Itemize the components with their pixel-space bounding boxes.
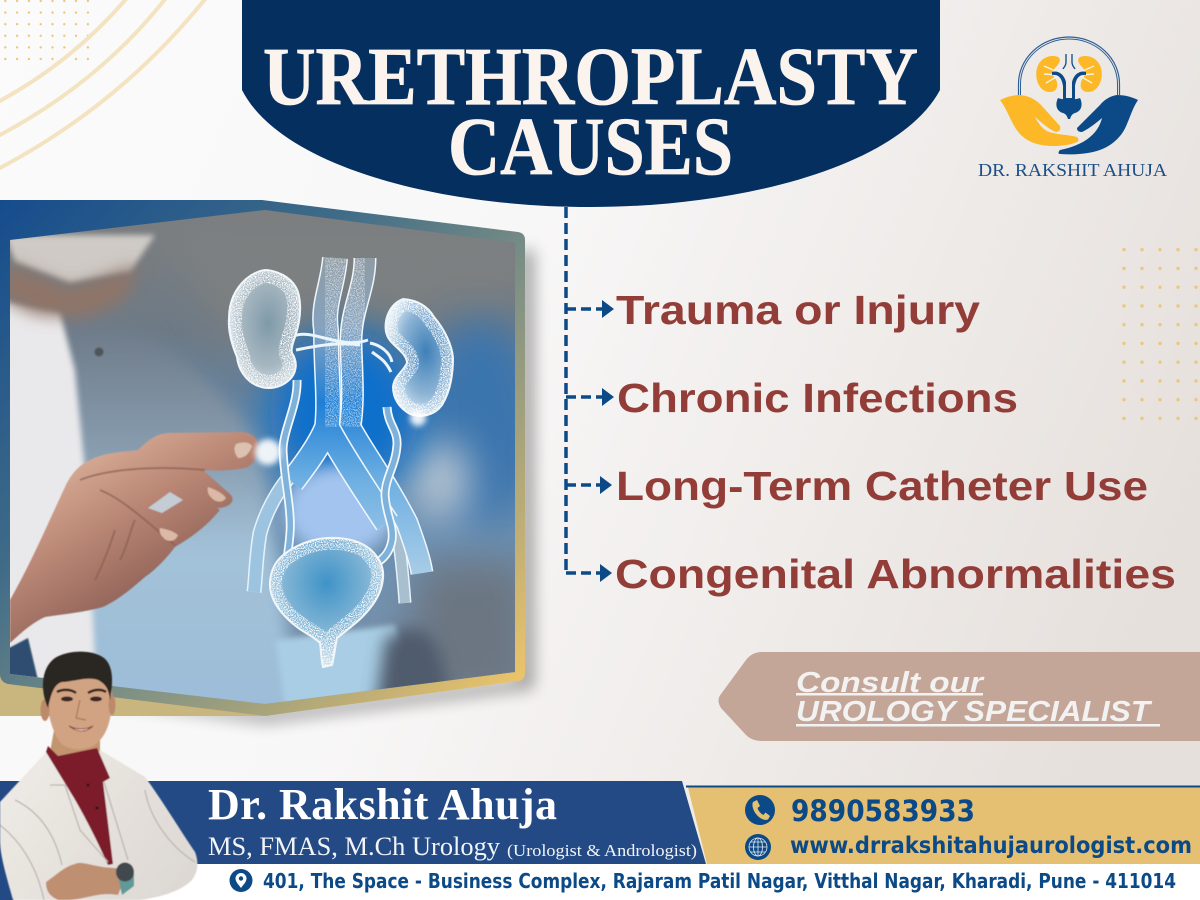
- footer: address strip: [0, 864, 1200, 900]
- tube texture: [325, 258, 365, 427]
- organ: bladder: [270, 538, 383, 667]
- frame back fold: [0, 200, 262, 260]
- arrow 2: [566, 388, 614, 406]
- head: [40, 652, 116, 749]
- footer: contact band: [686, 786, 1200, 864]
- photo blue glow: [270, 330, 420, 555]
- title text: CAUSES: [448, 100, 733, 192]
- renal vessels: [294, 334, 392, 372]
- arrow 3: [566, 476, 612, 494]
- title banner: [242, 0, 940, 207]
- photo panel: frame and image: [0, 200, 540, 722]
- title text: [263, 30, 918, 192]
- organ: left kidney: [229, 270, 300, 388]
- shirt: [46, 746, 113, 865]
- decoration: right dot grid: [1115, 240, 1200, 428]
- nose and smile: [76, 700, 86, 720]
- doctor name: Dr. Rakshit Ahuja: [208, 780, 557, 829]
- logo hand: blue: [1058, 95, 1138, 154]
- light flares: [255, 410, 426, 465]
- cause 2: Chronic Infections: [617, 375, 1018, 421]
- photo blurred backdrop: [70, 220, 540, 720]
- logo kidneys: [1036, 56, 1102, 92]
- hair: [43, 652, 112, 708]
- brows and eyes: [57, 690, 106, 693]
- coat folds: [0, 782, 195, 900]
- globe icon: [745, 834, 771, 860]
- footer: doctor name band: [0, 780, 706, 900]
- cause connector: dashed tree with arrows: [566, 207, 614, 582]
- callout: consult specialist: UROLOGY SPECIALIST: [796, 696, 1152, 728]
- photo coat and mask: [0, 235, 155, 700]
- phone number: 9890583933: [791, 794, 975, 828]
- coat: [0, 748, 197, 900]
- logo wordmark: DR. RAKSHIT AHUJA: [978, 160, 1167, 180]
- outer iliac branches: [254, 467, 300, 592]
- arrow 1: [566, 300, 614, 318]
- credentials: MS, FMAS, M.Ch Urology: [208, 831, 501, 861]
- frame front: [0, 200, 525, 716]
- organ: urinary tract hologram: [254, 258, 422, 603]
- organ: right kidney: [386, 299, 453, 416]
- forearm and hand: [46, 863, 124, 900]
- phone icon: [745, 795, 775, 825]
- photo base: [0, 200, 530, 720]
- frame shadow: [20, 250, 533, 722]
- photo hand: [10, 432, 258, 643]
- watch: [116, 862, 134, 895]
- vena cava: [292, 258, 387, 523]
- callout: consult specialist: [718, 652, 1200, 741]
- doctor portrait: [0, 652, 197, 900]
- arrow 4: [566, 564, 612, 582]
- frame bottom fold: [0, 670, 270, 716]
- aorta: [350, 258, 422, 573]
- ureter right: [378, 407, 397, 562]
- cause 4: Congenital Abnormalities: [615, 551, 1176, 597]
- photo image: [10, 210, 515, 704]
- cause 1: Trauma or Injury: [616, 287, 980, 333]
- logo urinary tract: [1052, 54, 1086, 119]
- title text: URETHROPLASTY: [263, 30, 918, 122]
- logo arch: [1018, 37, 1120, 95]
- callout: consult specialist: Consult our: [796, 667, 985, 699]
- shirt buttons: [86, 784, 98, 810]
- neck: [50, 725, 100, 790]
- causes list: [615, 287, 1176, 597]
- pin icon: [230, 869, 252, 892]
- ureter left: [283, 380, 297, 563]
- decoration: top-left arcs and dots: [0, 0, 206, 169]
- speciality: (Urologist & Andrologist): [507, 841, 697, 860]
- cause 3: Long-Term Catheter Use: [616, 463, 1148, 509]
- logo: [978, 37, 1167, 180]
- logo hand: yellow: [1000, 95, 1078, 146]
